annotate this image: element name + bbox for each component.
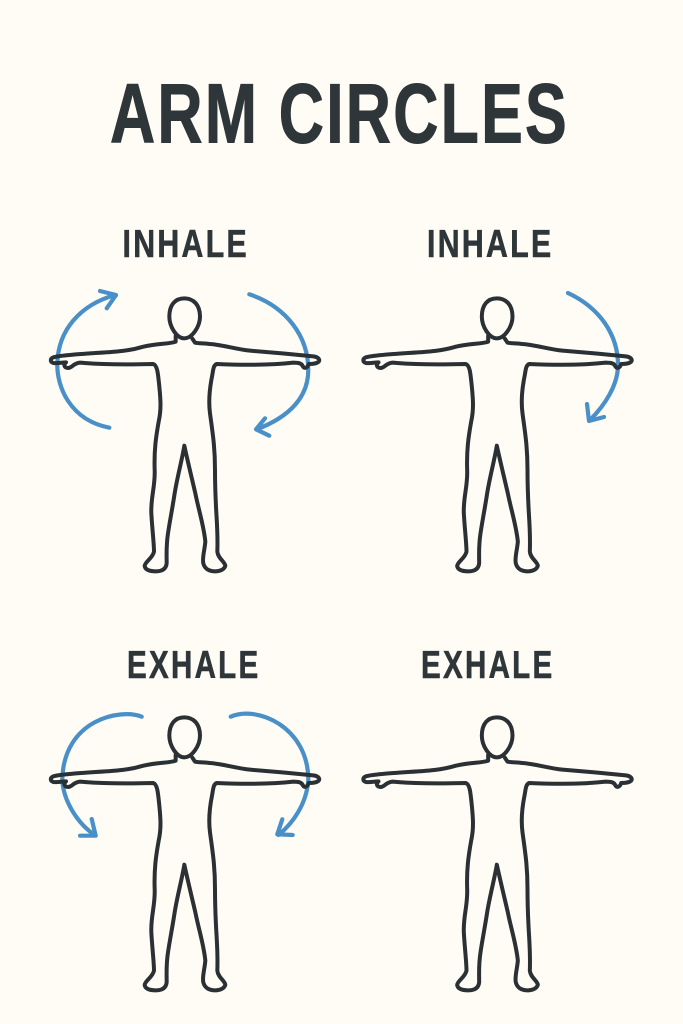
icon: left arrow circling up — [57, 291, 116, 428]
figure: standing person, arms out — [51, 717, 319, 990]
icon: right arrow circling down — [231, 714, 308, 835]
panel: inhale with both arrows — [51, 291, 319, 571]
heading: inhale, top left: INHALE — [122, 223, 249, 266]
panel: exhale without arrows — [363, 717, 632, 990]
heading: inhale, top right: INHALE — [427, 223, 554, 266]
panel: exhale with both arrows — [51, 714, 319, 990]
icon: left arrow circling down — [62, 714, 142, 836]
figure: standing person, arms out — [51, 298, 319, 571]
icon: right arrow circling down — [249, 294, 308, 436]
panel: inhale with right arrow — [363, 293, 632, 571]
heading: exhale, bottom right: EXHALE — [421, 644, 554, 687]
heading: exhale, bottom left: EXHALE — [127, 644, 260, 687]
figure: standing person, arms out — [363, 717, 632, 990]
figure: standing person, arms out — [363, 298, 632, 571]
icon: right arrow circling down — [568, 293, 618, 421]
